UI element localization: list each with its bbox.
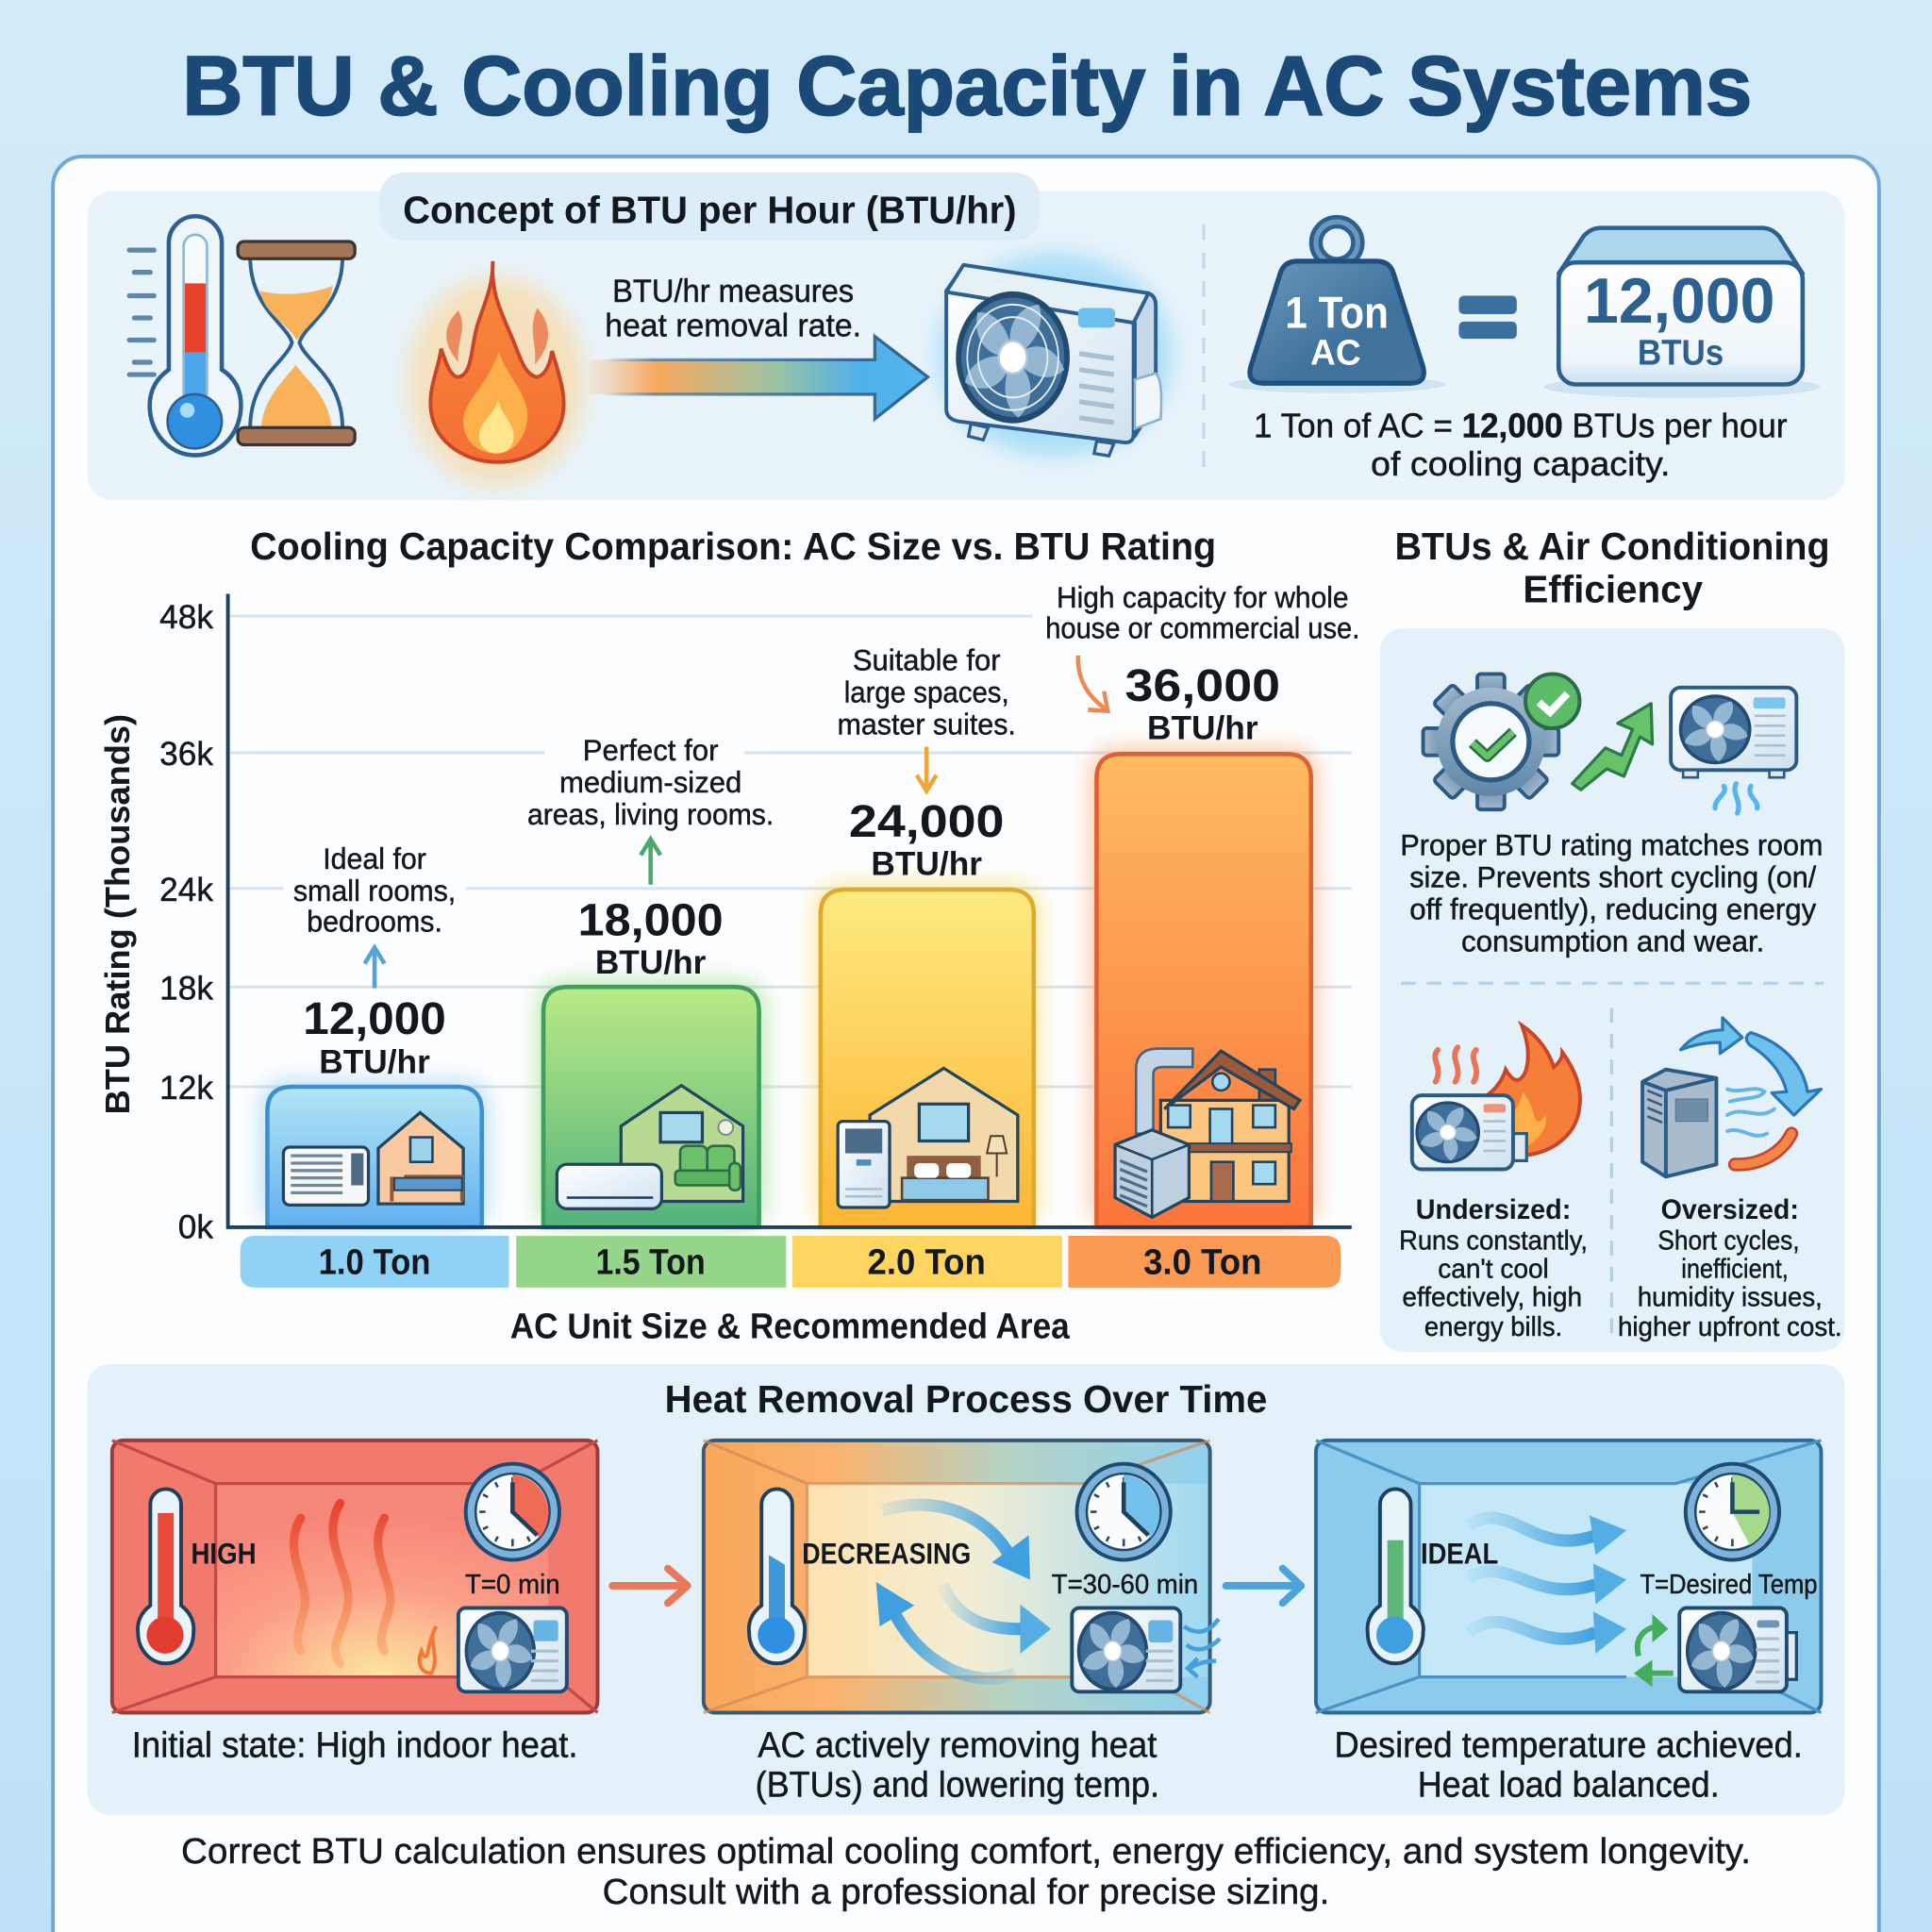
text: oversized: inefficient, bbox=[1681, 1254, 1789, 1284]
caption: AC removing heat bbox=[756, 1726, 1159, 1805]
annotation: 2.0 ton bbox=[838, 644, 1016, 741]
icon: window AC and small room bbox=[283, 1112, 463, 1205]
footer note: Consult with a professional for precise sizing. bbox=[603, 1873, 1329, 1912]
airflow arrows bbox=[876, 1505, 1051, 1678]
arrow: step two to three bbox=[1226, 1569, 1301, 1603]
value label: 24,000: BTU/hr bbox=[871, 845, 982, 882]
icon: AC unit with airflow bbox=[1671, 688, 1796, 813]
panel: efficiency bbox=[1380, 628, 1844, 1352]
text: oversized: Oversized: bbox=[1661, 1194, 1799, 1225]
text: heat removal rate: heat removal rate. bbox=[605, 308, 861, 344]
box: 12,000 BTUs bbox=[1544, 228, 1820, 398]
heading pill: concept bbox=[379, 173, 1040, 241]
grid lines and y ticks bbox=[159, 599, 1352, 1246]
bar: 1.0 ton bbox=[261, 1080, 488, 1227]
arrow: green callout bbox=[641, 839, 660, 885]
caption: desired temperature bbox=[1335, 1726, 1803, 1805]
label: T=30-60 min: T=30-60 min bbox=[1052, 1570, 1198, 1600]
heading: heat removal: Heat Removal Process Over Time bbox=[665, 1377, 1267, 1421]
text: proper BTU rating: off frequently), reducing energy bbox=[1409, 892, 1817, 925]
annotation: 1.5 ton bbox=[527, 734, 774, 831]
text: oversized: humidity issues, bbox=[1638, 1282, 1823, 1312]
value label: 12,000: 12,000 bbox=[303, 993, 446, 1044]
grid lines and y ticks: 0k bbox=[178, 1209, 213, 1246]
icon: tower AC and bedroom bbox=[838, 1068, 1018, 1208]
room: initial state bbox=[112, 1441, 597, 1713]
grid lines and y ticks: 12k bbox=[159, 1070, 213, 1107]
axes bbox=[228, 594, 1352, 1227]
bar: 1.5 ton bbox=[537, 981, 765, 1227]
icon: 1 ton weight: AC bbox=[1310, 334, 1361, 374]
arrow: step one to two bbox=[612, 1569, 688, 1603]
icon: flame bbox=[408, 261, 585, 487]
clock: T=30-60 bbox=[1077, 1464, 1171, 1560]
text: oversized: Short cycles, bbox=[1657, 1225, 1800, 1256]
grid lines and y ticks: 48k bbox=[159, 599, 213, 636]
value label: 36,000 bbox=[1124, 660, 1280, 747]
value label: 36,000: BTU/hr bbox=[1147, 710, 1258, 747]
icon: hourglass bbox=[238, 242, 355, 445]
heat waves bbox=[293, 1503, 391, 1663]
ton labels strip: 3.0 Ton bbox=[1143, 1243, 1261, 1283]
heading: efficiency: BTUs & Air Conditioning bbox=[1395, 525, 1830, 568]
title: BTU & Cooling Capacity in AC Systems bbox=[182, 39, 1752, 132]
clock: desired temp bbox=[1686, 1464, 1779, 1560]
footer note: Correct BTU calculation ensures optimal cooling comfort, energy efficiency, and system longevity. bbox=[181, 1832, 1751, 1872]
ton labels strip bbox=[241, 1236, 1341, 1288]
text: 1 ton definition: of cooling capacity. bbox=[1371, 444, 1670, 483]
icon: thermometer bbox=[129, 216, 241, 456]
annotation: 2.0 ton: master suites. bbox=[838, 708, 1016, 741]
AC unit: balanced bbox=[1634, 1607, 1796, 1691]
annotation: 1.0 ton: Ideal for bbox=[323, 842, 426, 875]
text: 1 ton definition: 1 Ton of AC = 12,000 BTUs per hour bbox=[1254, 407, 1788, 445]
grid lines and y ticks: 18k bbox=[159, 970, 213, 1007]
icon: central AC and house bbox=[1115, 1049, 1300, 1217]
text: proper BTU rating: Proper BTU rating matches room bbox=[1400, 828, 1823, 861]
box: 12,000 BTUs: BTUs bbox=[1638, 334, 1724, 374]
annotation: 2.0 ton: Suitable for bbox=[853, 644, 1001, 677]
room: ideal bbox=[1316, 1441, 1821, 1713]
thermometer: ideal bbox=[1368, 1489, 1424, 1663]
label: T=0 min: T=0 min bbox=[465, 1570, 560, 1600]
text: heat removal rate: BTU/hr measures bbox=[612, 274, 854, 309]
grid lines and y ticks: 36k bbox=[159, 736, 213, 773]
x axis title: AC Unit Size & Recommended Area bbox=[510, 1307, 1071, 1346]
caption: initial state: Initial state: High indoor heat. bbox=[132, 1726, 578, 1766]
icon: undersized unit with flame bbox=[1412, 1025, 1580, 1170]
value label: 36,000: 36,000 bbox=[1124, 660, 1280, 711]
annotation: 3.0 ton: High capacity for whole bbox=[1057, 581, 1349, 614]
equals sign bbox=[1458, 295, 1517, 339]
icon: 1 ton weight bbox=[1228, 222, 1445, 393]
annotation: 1.0 ton: bedrooms. bbox=[307, 905, 442, 938]
annotation: 3.0 ton bbox=[1045, 581, 1359, 645]
icon: 1 ton weight: 1 Ton bbox=[1285, 287, 1389, 337]
text: 1 ton definition bbox=[1254, 407, 1788, 483]
thermometer: decreasing bbox=[749, 1489, 805, 1663]
AC unit: off bbox=[458, 1607, 567, 1691]
text: undersized: can't cool bbox=[1438, 1254, 1549, 1284]
text: heat removal rate bbox=[605, 274, 861, 344]
value label: 24,000 bbox=[849, 796, 1004, 882]
AC unit: running bbox=[1072, 1607, 1220, 1691]
value label: 18,000 bbox=[578, 894, 724, 981]
room: cooling bbox=[704, 1441, 1220, 1713]
heading: chart title: Cooling Capacity Comparison: AC Size vs. BTU Rating bbox=[250, 525, 1216, 568]
value label: 18,000: 18,000 bbox=[578, 894, 724, 945]
grid lines and y ticks: 24k bbox=[159, 872, 213, 908]
ton labels strip: 1.5 Ton bbox=[596, 1243, 706, 1283]
annotation: 1.0 ton: small rooms, bbox=[293, 874, 456, 908]
text: undersized bbox=[1399, 1194, 1588, 1342]
label: DECREASING: DECREASING bbox=[802, 1537, 971, 1570]
arrow: heat to AC bbox=[589, 337, 928, 419]
ton labels strip: 1.0 Ton bbox=[319, 1243, 430, 1283]
ton labels strip: 2.0 Ton bbox=[868, 1243, 986, 1283]
y axis title: BTU Rating (Thousands) bbox=[98, 714, 137, 1114]
text: undersized: Undersized: bbox=[1416, 1194, 1571, 1225]
icon: wall AC and living room bbox=[557, 1086, 743, 1208]
icon: oversized unit with cycle arrows bbox=[1642, 1018, 1821, 1176]
text: proper BTU rating: consumption and wear. bbox=[1461, 924, 1764, 958]
text: oversized bbox=[1618, 1194, 1842, 1342]
annotation: 2.0 ton: large spaces, bbox=[844, 675, 1009, 708]
divider bbox=[1203, 225, 1205, 475]
annotation: 3.0 ton: house or commercial use. bbox=[1045, 612, 1359, 645]
annotation: 1.5 ton: medium-sized bbox=[559, 766, 741, 799]
clock: T=0 bbox=[466, 1464, 559, 1560]
annotation: 1.5 ton: Perfect for bbox=[583, 734, 718, 767]
arrow: blue callout bbox=[365, 947, 385, 989]
heading pill: concept: Concept of BTU per Hour (BTU/hr) bbox=[403, 188, 1017, 231]
text: undersized: Runs constantly, bbox=[1399, 1225, 1588, 1256]
value label: 18,000: BTU/hr bbox=[595, 944, 707, 981]
heading: efficiency: Efficiency bbox=[1523, 568, 1704, 611]
annotation: 1.0 ton bbox=[293, 842, 456, 938]
arrow: orange callout bbox=[917, 747, 937, 791]
heading: efficiency bbox=[1395, 525, 1830, 611]
label: HIGH: HIGH bbox=[191, 1537, 257, 1570]
value label: 12,000 bbox=[303, 993, 446, 1081]
icon: green rising arrow bbox=[1573, 704, 1653, 790]
cool air waves bbox=[1469, 1516, 1626, 1654]
text: proper BTU rating bbox=[1400, 828, 1823, 958]
box: 12,000 BTUs: 12,000 bbox=[1584, 266, 1774, 337]
bar: 3.0 ton bbox=[1091, 748, 1317, 1227]
annotation: 1.5 ton: areas, living rooms. bbox=[527, 798, 774, 831]
panel: concept of BTU per hour bbox=[88, 173, 1844, 500]
caption: desired temperature: Desired temperature achieved. bbox=[1335, 1726, 1803, 1766]
bar chart: AC size versus BTU rating bbox=[98, 579, 1363, 1346]
text: proper BTU rating: size. Prevents short cycling (on/ bbox=[1409, 860, 1817, 893]
label: IDEAL: IDEAL bbox=[1421, 1537, 1498, 1570]
icon: gear with check bbox=[1424, 674, 1579, 809]
caption: AC removing heat: AC actively removing heat bbox=[758, 1726, 1158, 1766]
footer note bbox=[181, 1832, 1751, 1912]
text: oversized: higher upfront cost. bbox=[1618, 1312, 1842, 1342]
small flame bbox=[420, 1626, 436, 1674]
text: undersized: effectively, high bbox=[1402, 1282, 1582, 1312]
value label: 12,000: BTU/hr bbox=[319, 1044, 430, 1081]
caption: AC removing heat: (BTUs) and lowering temp. bbox=[756, 1765, 1159, 1805]
label: T=Desired Temp: T=Desired Temp bbox=[1640, 1570, 1818, 1600]
panel: heat removal process bbox=[88, 1364, 1844, 1815]
caption: desired temperature: Heat load balanced. bbox=[1418, 1765, 1720, 1805]
bar: 2.0 ton bbox=[814, 883, 1040, 1227]
thermometer: high bbox=[138, 1489, 193, 1663]
text: undersized: energy bills. bbox=[1424, 1312, 1562, 1342]
icon: outdoor AC unit bbox=[938, 254, 1172, 456]
white masks behind annotations bbox=[283, 579, 1363, 937]
arrow: curved orange callout bbox=[1078, 656, 1108, 711]
value label: 24,000: 24,000 bbox=[849, 796, 1004, 847]
